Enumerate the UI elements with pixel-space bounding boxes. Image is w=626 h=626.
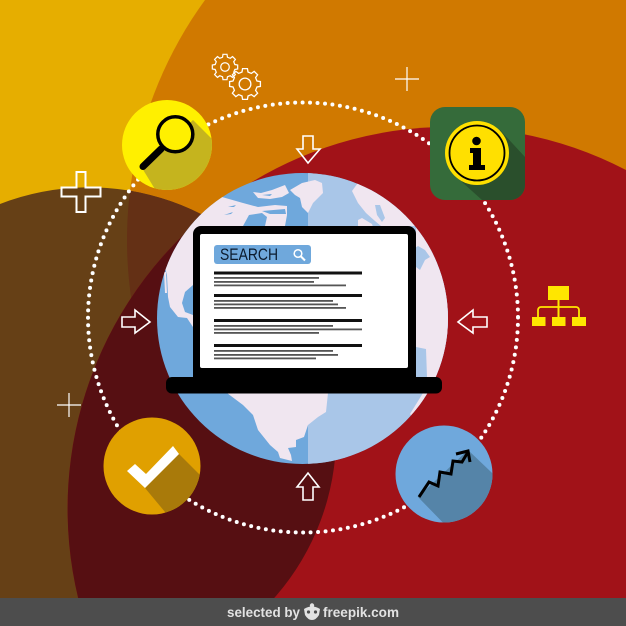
land: south-east sliver <box>410 394 428 416</box>
ocean: small patches east <box>415 246 430 270</box>
arrow: down <box>297 136 320 163</box>
laptop <box>166 226 442 394</box>
footer credit right: freepik.com <box>323 604 399 620</box>
arrow: right-pointing <box>122 310 150 333</box>
land: thin coastal sliver <box>164 272 167 293</box>
laptop base <box>166 377 442 394</box>
icon: check badge <box>104 418 200 514</box>
icon: growth chart badge <box>396 426 492 522</box>
dotted orbit ring <box>88 102 518 532</box>
land: Greenland <box>290 180 323 213</box>
land: North America <box>166 197 287 327</box>
land: British Isles blob <box>358 218 373 226</box>
laptop screen <box>200 234 408 368</box>
ocean: gaps between islands <box>262 194 272 196</box>
icon: info badge <box>430 107 525 200</box>
icon: magnifier badge <box>122 100 212 190</box>
land: Europe and Africa side <box>352 184 448 377</box>
arrow: left-pointing <box>458 310 487 333</box>
footer bar <box>0 598 626 626</box>
ocean: small inlets <box>224 205 236 215</box>
globe <box>150 170 460 470</box>
search bar: SEARCH <box>220 246 278 264</box>
ocean: Hudson Bay <box>243 213 267 226</box>
search results <box>214 272 362 359</box>
icon: org chart <box>532 286 586 326</box>
land: South America <box>227 393 328 461</box>
land: Arctic islands <box>253 185 289 199</box>
icon: thin plus lower left <box>57 393 81 417</box>
ocean: Baltic <box>375 205 385 222</box>
icon: thin plus top right <box>395 67 419 91</box>
footer credit left: selected by <box>227 604 300 620</box>
search bar <box>214 245 311 264</box>
ocean: Gulf <box>182 285 193 315</box>
footer logo <box>304 603 320 620</box>
arrow: up <box>297 473 319 500</box>
icon: gears <box>212 54 260 99</box>
ocean: channel above Quebec <box>262 209 286 214</box>
icon: outlined plus <box>62 172 100 212</box>
laptop lid <box>193 226 416 380</box>
